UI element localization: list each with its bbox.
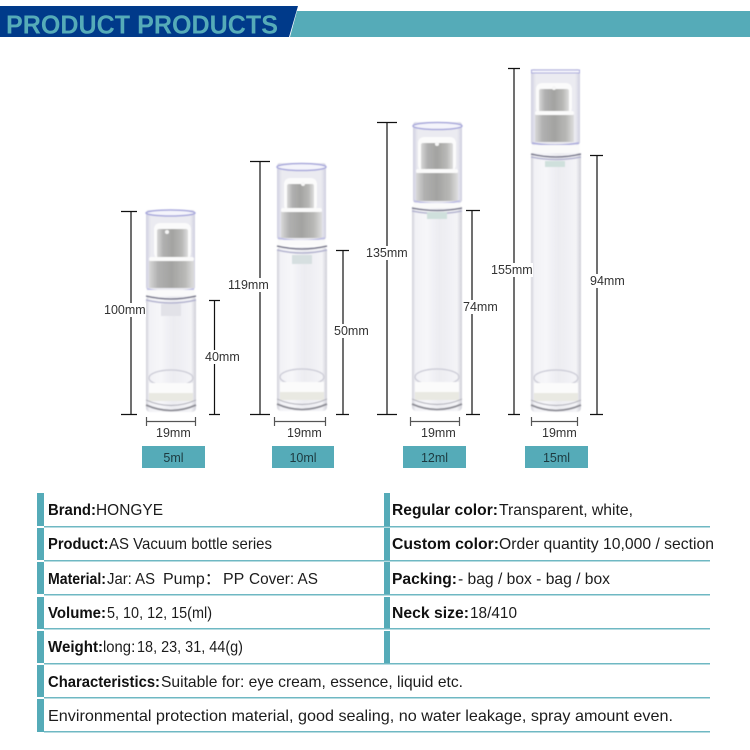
- row: neck size: Neck size:: [392, 605, 469, 622]
- volume tag 12ml: 12ml: [421, 451, 448, 465]
- dimension 100mm: 100mm: [104, 303, 146, 317]
- dimension 19mm: [532, 417, 578, 440]
- bottle 5ml: [146, 210, 196, 412]
- bottle 10ml: [277, 163, 327, 411]
- row: neck size: 18/410: [470, 605, 517, 622]
- row: volume: Volume:: [48, 605, 106, 622]
- row: material: Material:: [48, 571, 106, 588]
- row: regular color: Transparent, white,: [499, 502, 633, 519]
- dimension 19mm: 19mm: [542, 426, 577, 440]
- dimension 19mm: [410, 417, 460, 440]
- dimension 40mm: [205, 300, 241, 414]
- dimension 119mm: [228, 162, 270, 414]
- header banner: [0, 6, 750, 40]
- row: product: Product:: [48, 536, 108, 553]
- dimension 74mm: 74mm: [463, 300, 498, 314]
- row: packing: - bag / box - bag / box: [458, 571, 610, 588]
- dimension 19mm: 19mm: [156, 426, 191, 440]
- row: regular color: Regular color:: [392, 502, 498, 519]
- table bars and rules: [37, 493, 710, 732]
- bottle 12ml: [412, 122, 462, 411]
- dimension 19mm: [274, 417, 326, 440]
- row: weight: Weight:: [48, 639, 103, 656]
- dimension 19mm: [146, 417, 196, 440]
- volume tag 5ml: 5ml: [163, 451, 184, 465]
- dimension 19mm: 19mm: [287, 426, 322, 440]
- row: characteristics: Suitable for: eye cream, essence, liquid etc.: [161, 674, 463, 691]
- volume tag 15ml: [525, 446, 588, 468]
- row: custom color: Custom color:: [392, 536, 499, 553]
- dimension 155mm: 155mm: [491, 263, 533, 277]
- dimension 135mm: 135mm: [366, 246, 408, 260]
- dimension 50mm: [334, 250, 370, 414]
- dimension 155mm: [491, 68, 533, 414]
- dimension 74mm: [463, 210, 499, 414]
- dimension 40mm: 40mm: [205, 350, 240, 364]
- panel: 12ml bottle: [366, 122, 499, 468]
- row: characteristics: Characteristics:: [48, 674, 160, 691]
- volume tag 12ml: [403, 446, 466, 468]
- row: weight: 18, 23, 31, 44(g): [137, 639, 243, 656]
- row: material: Jar: AS: [107, 571, 155, 588]
- dimension 94mm: 94mm: [590, 274, 625, 288]
- volume tag 5ml: [142, 446, 205, 468]
- row: brand: HONGYE: [96, 502, 163, 519]
- row: environmental note: Environmental protection material, good sealing, no water leakage, spray amount even.: [48, 708, 673, 725]
- dimension 19mm: 19mm: [421, 426, 456, 440]
- panel: specification table: [37, 493, 714, 732]
- panel: 10ml bottle: [228, 162, 370, 468]
- heading: PRODUCT PRODUCTS: [6, 12, 278, 40]
- volume tag 15ml: 15ml: [543, 451, 570, 465]
- bottle 15ml: [531, 69, 581, 412]
- dimension 100mm: [104, 212, 146, 414]
- row: material: Pump：: [163, 571, 221, 588]
- panel: 15ml bottle: [491, 68, 626, 468]
- row: volume: 5, 10, 12, 15(ml): [107, 605, 212, 622]
- dimension 94mm: [590, 156, 626, 414]
- dimension 119mm: 119mm: [228, 278, 269, 292]
- volume tag 10ml: [272, 446, 334, 468]
- dimension 50mm: 50mm: [334, 324, 369, 338]
- dimension 135mm: [366, 122, 408, 414]
- volume tag 10ml: 10ml: [289, 451, 317, 465]
- row: weight: :: [131, 639, 135, 656]
- row: material: Cover: AS: [249, 571, 318, 588]
- panel: 5ml bottle: [104, 210, 241, 468]
- row: product: AS Vacuum bottle series: [109, 536, 272, 553]
- row: brand: Brand:: [48, 502, 96, 519]
- row: material: PP: [223, 571, 244, 588]
- row: weight: long: [103, 639, 131, 656]
- row: packing: Packing:: [392, 571, 457, 588]
- row: custom color: Order quantity 10,000 / section: [499, 536, 714, 553]
